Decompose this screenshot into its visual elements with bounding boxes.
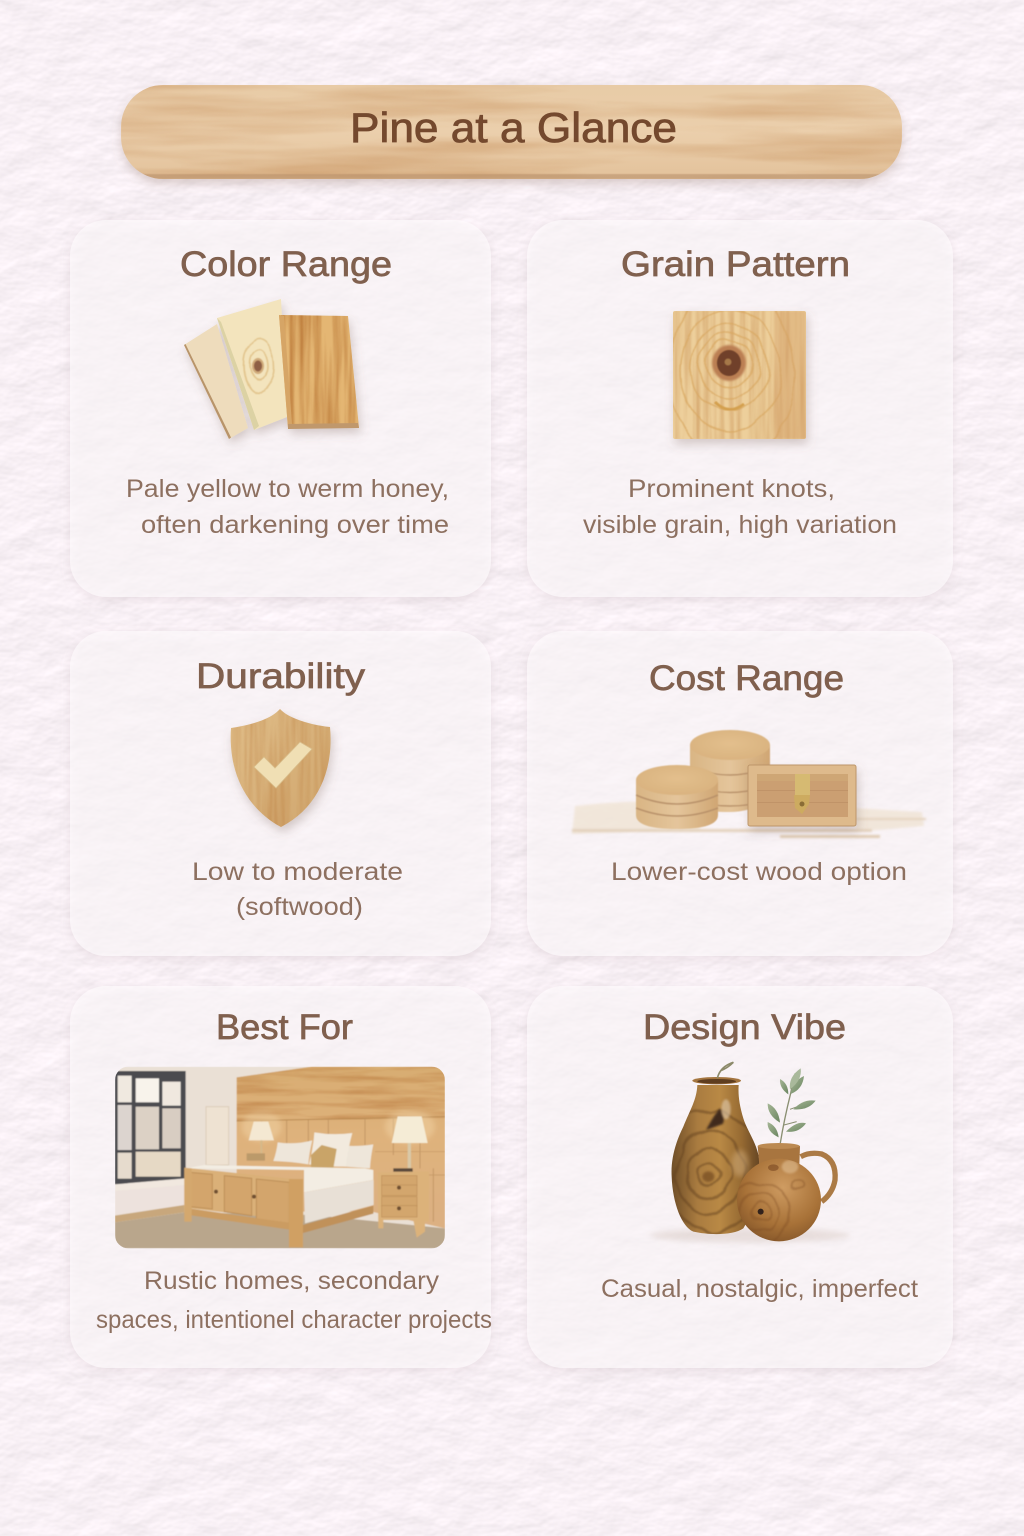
sprig	[768, 1068, 816, 1145]
text: grain pattern: visible grain, high variation	[583, 511, 897, 539]
jug	[729, 1143, 835, 1241]
icon: wooden vases with sprig	[650, 1062, 850, 1243]
title banner	[121, 85, 902, 179]
panel: durability	[70, 631, 491, 956]
front stack of rounds	[636, 765, 718, 829]
text: design vibe: Casual, nostalgic, imperfect	[601, 1275, 918, 1303]
panel: design vibe	[527, 986, 953, 1368]
text: color range: often darkening over time	[141, 511, 449, 539]
panel: color range	[70, 220, 491, 597]
text: color range	[126, 475, 449, 539]
image: pine bedroom	[115, 1067, 445, 1248]
right lamp	[392, 1116, 428, 1172]
text: durability: Low to moderate	[192, 858, 403, 886]
heading: color range: Color Range	[180, 245, 392, 284]
icon: three wood planks	[184, 299, 365, 439]
window	[115, 1071, 186, 1184]
text: durability: (softwood)	[236, 893, 363, 921]
text: grain pattern: Prominent knots,	[628, 475, 835, 503]
heading: grain pattern: Grain Pattern	[621, 245, 850, 284]
chest	[748, 765, 856, 826]
icon: pine square with knot	[670, 311, 813, 449]
wood wall	[237, 1067, 445, 1228]
text: color range: Pale yellow to werm honey,	[126, 475, 449, 503]
pillows	[273, 1132, 373, 1169]
bed frame	[184, 1168, 373, 1247]
icon: wood rounds and chest	[572, 730, 926, 838]
heading: cost range: Cost Range	[649, 659, 844, 698]
icon: wooden shield with check	[228, 706, 334, 830]
panel: grain pattern	[527, 220, 953, 597]
heading: design vibe: Design Vibe	[643, 1008, 846, 1047]
panel: cost range	[527, 631, 953, 956]
nightstand	[378, 1172, 429, 1238]
text: grain pattern	[583, 475, 897, 539]
left lamp	[247, 1122, 274, 1161]
back stack of rounds	[690, 730, 770, 812]
text: best for	[96, 1267, 492, 1334]
panel: best for	[70, 986, 492, 1368]
heading: best for: Best For	[216, 1008, 353, 1047]
text: best for: spaces, intentionel character projects	[96, 1306, 492, 1334]
text: cost range: Lower-cost wood option	[611, 858, 907, 886]
title: Pine at a Glance	[350, 104, 677, 151]
mattress	[185, 1165, 373, 1192]
heading: durability: Durability	[196, 657, 366, 696]
text: best for: Rustic homes, secondary	[144, 1267, 440, 1295]
text: durability	[192, 858, 403, 921]
tall vase	[672, 1062, 760, 1234]
